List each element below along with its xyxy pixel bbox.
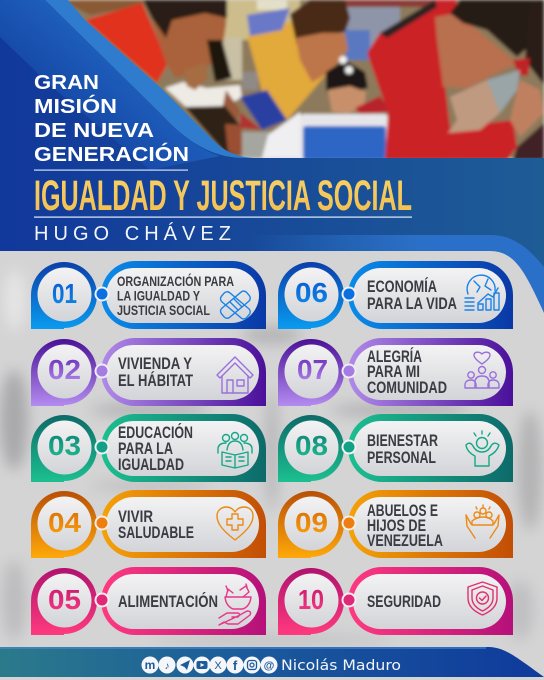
footer bar [0,647,544,677]
footer text: Nicolás Maduro [281,658,401,674]
heading: Gran Misión de Nueva Generación: GRAN [34,72,99,94]
panel: card 04: 04 [48,507,81,538]
panel: card 09 [278,490,513,558]
panel: card 06 [278,261,513,329]
icon: globe and growth bars [465,275,499,310]
icon: people reading [218,432,252,468]
social media icons: m [145,658,155,672]
panel: card 04: VIVIR [118,508,153,526]
icon: hands holding people [466,505,499,538]
icon: happy person [466,431,499,466]
subtitle: Hugo Chávez: HUGO CHÁVEZ [34,222,231,245]
panel: card 04: SALUDABLE [118,524,194,542]
icon: community with heart [465,352,499,388]
panel: card 02: EL HÁBITAT [118,371,193,390]
panel: photo collage [60,0,544,160]
panel: card 09: HIJOS DE [367,517,426,535]
panel: card 03: IGUALDAD [118,456,184,474]
icon: house [217,357,253,393]
heading: Gran Misión de Nueva Generación: GENERACIÓN [34,142,189,166]
panel: card 01: ORGANIZACIÓN PARA [117,272,234,289]
panel: card 02: 02 [48,354,81,385]
panel: card 06: PARA LA VIDA [367,295,457,313]
panel: card 10: 10 [298,584,324,615]
panel: card 08: BIENESTAR [367,432,438,450]
heading: Gran Misión de Nueva Generación: MISIÓN [34,94,117,118]
social media icons: ♪ [164,661,170,672]
panel: card 08: PERSONAL [367,449,436,467]
panel: card 07: PARA MI [367,363,420,381]
panel: card 03: EDUCACIÓN [118,423,193,442]
panel: card 07 [278,338,513,406]
panel: card 08: 08 [295,430,328,461]
panel: blue header background [0,0,544,320]
panel: card 10: SEGURIDAD [367,593,441,611]
panel: card 01: JUSTICIA SOCIAL [117,302,210,318]
panel: card 09: 09 [295,507,328,538]
social media icons: X [214,660,222,672]
heading: Gran Misión de Nueva Generación: DE NUEVA [34,120,154,142]
panel: card 05: 05 [48,584,81,615]
panel: card 09: ABUELOS E [367,502,438,520]
panel: card 06: ECONOMÍA [367,277,437,296]
panel: card 05: ALIMENTACIÓN [118,592,218,611]
panel: card 03: 03 [48,430,81,461]
panel: card 03 [31,414,266,482]
icon: joined hands [219,289,252,321]
panel: card 08 [278,414,513,482]
panel: card 01: 01 [52,278,77,309]
icon: heart with cross [217,507,253,540]
panel: card 03: PARA LA [118,440,173,458]
social media icons: f [233,658,238,673]
icon: hand holding food bowl [219,584,251,625]
panel: card 01: LA IGUALDAD Y [117,288,201,304]
panel: card 01 [31,261,266,329]
panel: card 02: VIVIENDA Y [118,354,193,373]
panel: card 07: COMUNIDAD [367,379,447,397]
social media icons [142,656,278,674]
panel: card 06: 06 [295,277,328,308]
panel: card 07: ALEGRÍA [367,347,422,366]
heading: Gran Misión de Nueva Generación [34,72,189,171]
panel: card 07: 07 [297,354,328,385]
panel: card 10 [278,567,513,635]
panel: card 05 [31,567,266,635]
panel: card 04 [31,490,266,558]
icon: security shield [468,582,497,615]
panel: card 02 [31,338,266,406]
panel: card 09: VENEZUELA [367,532,443,550]
social media icons: @ [264,660,275,672]
panel: grey background [0,251,544,680]
